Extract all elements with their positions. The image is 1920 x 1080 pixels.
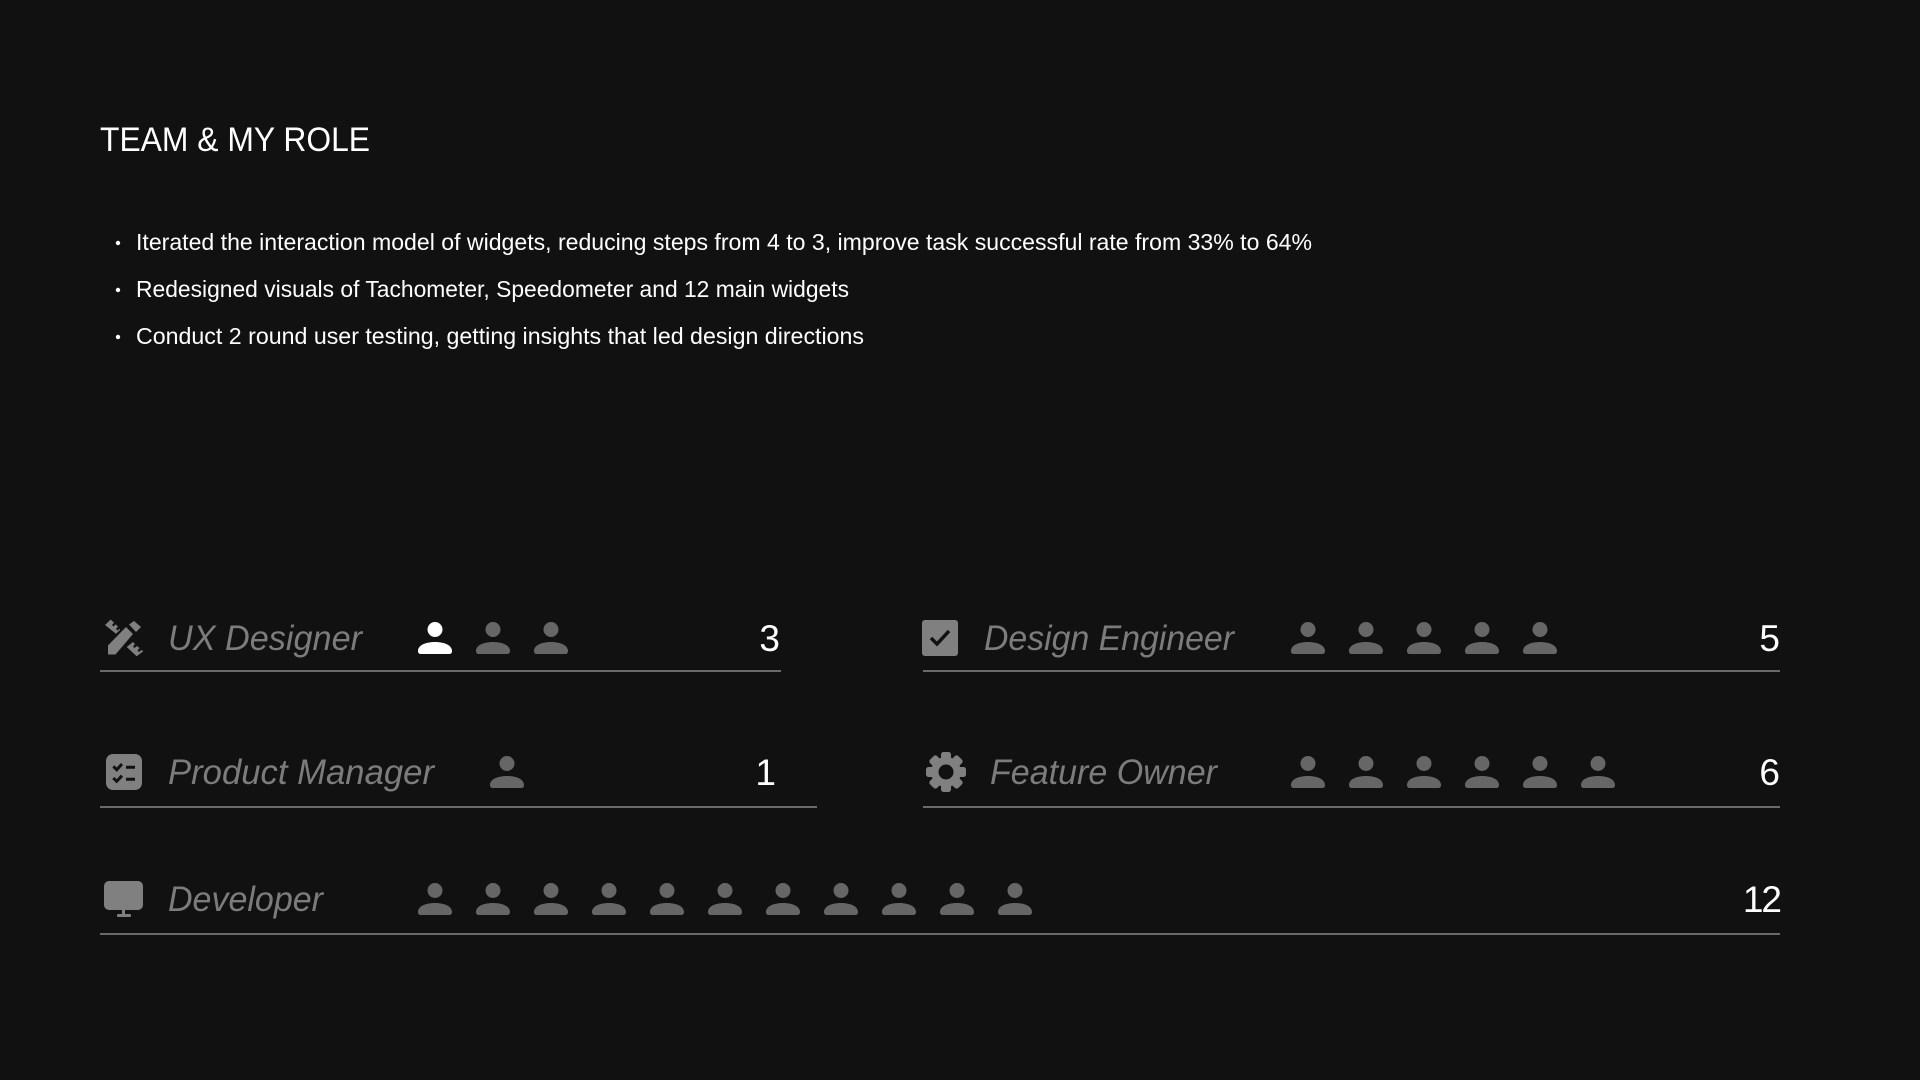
people: 5 design engineers [1291,622,1557,654]
row: Feature Owner [923,752,1780,807]
bullet 1: Iterated the interaction model of widgets, reducing steps from 4 to 3, improve task successful rate from 33% to 64% [136,229,1312,255]
row: UX Designer [100,618,781,671]
count: 6 [1759,752,1780,793]
count: 1 [755,752,776,793]
bullet list: my role [116,229,1312,349]
icon: crossed pencil and ruler [105,620,143,656]
label: Developer [168,880,324,919]
row: Developer [100,879,1780,934]
count: 3 [759,618,780,659]
people: 3 UX designers, first highlighted [418,622,568,654]
people: 11 developers [418,883,1032,915]
people: 1 product manager [490,756,524,788]
icon: gear [926,752,966,792]
label: UX Designer [168,619,363,658]
icon: checklist [106,754,142,790]
bullet 2: Redesigned visuals of Tachometer, Speedometer and 12 main widgets [136,276,849,302]
label: Product Manager [168,753,435,792]
icon: checkbox [922,620,958,656]
count: 5 [1759,618,1780,659]
count: 12 [1743,879,1780,920]
row: Design Engineer [922,618,1780,671]
title: TEAM & MY ROLE [100,121,370,159]
icon: monitor [104,881,143,917]
label: Design Engineer [984,619,1235,658]
label: Feature Owner [990,753,1218,792]
row: Product Manager [100,752,817,807]
people: 6 feature owners [1291,756,1615,788]
bullet 3: Conduct 2 round user testing, getting insights that led design directions [136,323,864,349]
